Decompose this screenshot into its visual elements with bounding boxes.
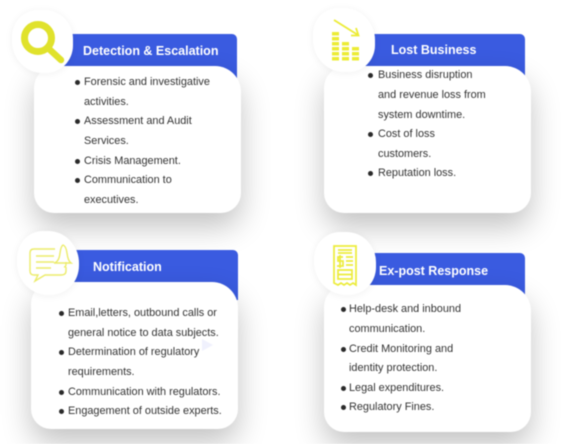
bullet list: detection: Services. [84, 135, 129, 147]
bullet list: ex-post response [340, 303, 462, 414]
card body: notification [31, 282, 238, 429]
panel: detection and escalation [18, 20, 256, 243]
bullet list: detection: Communication to [84, 174, 172, 186]
bullet list: lost business: system downtime. [378, 109, 465, 121]
bullet list: notification: requirements. [68, 366, 135, 378]
panel: lost business [308, 18, 546, 243]
bullet list: notification [58, 307, 222, 418]
bullet list: lost business: customers. [378, 148, 431, 160]
bullet list: detection: executives. [84, 194, 138, 206]
bullet list: notification: Determination of regulatory [68, 346, 199, 358]
heading: ex-post response: Ex-post Response [379, 264, 488, 278]
bullet list: notification: Email,letters, outbound calls or [68, 307, 217, 319]
bullet list: ex-post response: Legal expenditures. [349, 382, 444, 394]
bullet list: lost business: Reputation loss. [378, 167, 456, 179]
icon blob: lost business [313, 8, 375, 72]
bullet list: lost business: Business disruption [378, 69, 472, 81]
bullet list: notification: Engagement of outside experts. [68, 405, 222, 417]
bullet list: ex-post response: communication. [349, 323, 425, 335]
bullet list: detection [74, 76, 210, 206]
heading: detection: Detection & Escalation [83, 44, 218, 58]
header bar: detection [62, 34, 237, 84]
icon: magnifying glass [20, 20, 65, 64]
bullet list: lost business: Cost of loss [378, 128, 435, 140]
icon blob: detection [12, 10, 73, 73]
card body: lost business [324, 66, 531, 213]
header bar: notification [67, 250, 238, 300]
header bar: ex-post response [364, 253, 525, 303]
bullet list: ex-post response: Credit Monitoring and [349, 343, 453, 355]
icon: speech bubble with bell [28, 244, 74, 284]
header bar: lost business [363, 34, 525, 84]
card body: ex-post response [324, 285, 531, 432]
bullet list: detection: Assessment and Audit [84, 115, 192, 127]
panel: ex-post response [308, 232, 546, 444]
icon blob: ex-post response [314, 232, 376, 295]
bullet list: detection: activities. [84, 96, 129, 108]
bullet list: ex-post response: Help-desk and inbound [349, 303, 461, 315]
panel: notification [16, 231, 254, 444]
bullet list: detection: Forensic and investigative [84, 76, 210, 88]
icon blob: notification [17, 231, 79, 295]
icon: faint play triangle [202, 340, 212, 350]
card body: detection [34, 66, 241, 213]
heading: lost business: Lost Business [391, 43, 476, 57]
bullet list: lost business: and revenue loss from [378, 89, 486, 101]
heading: notification: Notification [93, 260, 162, 274]
bullet list: notification: Communication with regulators. [68, 386, 221, 398]
bullet list: lost business [367, 69, 486, 180]
icon: falling bar chart [331, 18, 360, 62]
bullet list: detection: Crisis Management. [84, 155, 181, 167]
icon: receipt [332, 244, 358, 287]
bullet list: notification: general notice to data subjects. [68, 327, 219, 339]
bullet list: ex-post response: Regulatory Fines. [349, 401, 434, 413]
bullet list: ex-post response: identity protection. [349, 362, 437, 374]
